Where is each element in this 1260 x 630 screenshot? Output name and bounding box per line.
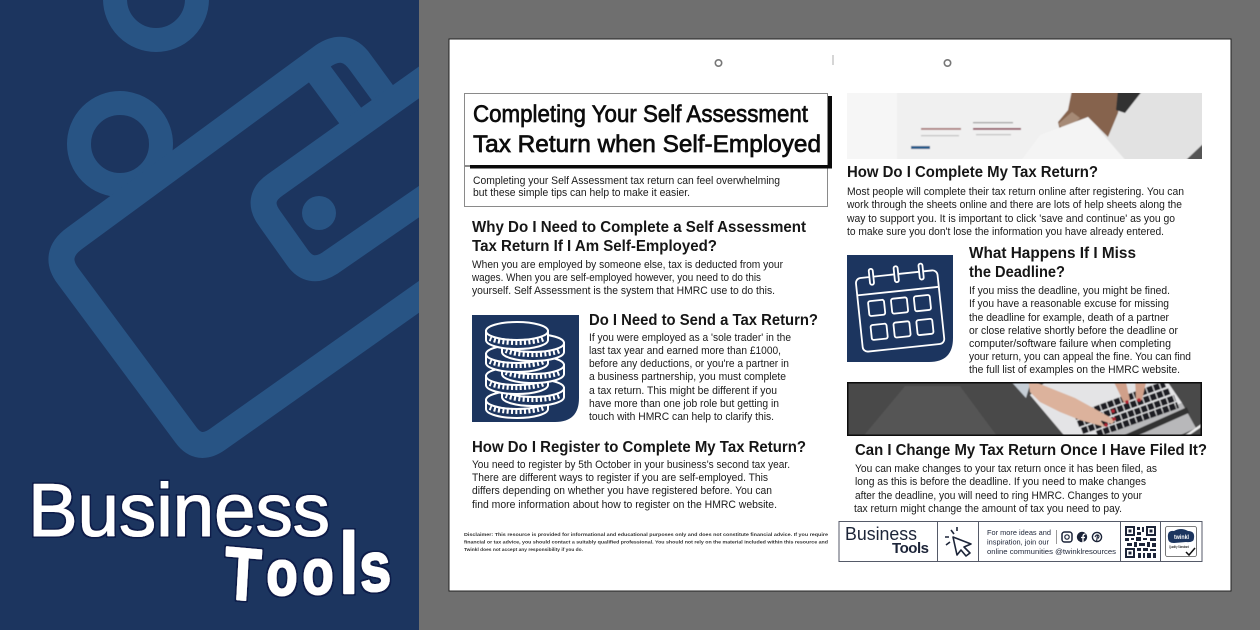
footer logo: Business Tools xyxy=(845,524,930,557)
icon: registration marks xyxy=(715,55,951,66)
section: how do I complete: to make sure you don't lose the information you have already entered. xyxy=(847,226,1164,238)
section: how do I complete: way to support you. It is important to click 'save and continue' as you go xyxy=(846,213,1175,225)
section: can I change my tax return: tax return might change the amount of tax you need to pay. xyxy=(854,503,1122,515)
disclaimer: Twinkl does not accept any responsibility if you do. xyxy=(464,547,583,552)
section: what happens if I miss the deadline: or close relative shortly before the deadline or xyxy=(969,325,1178,337)
title text: Tax Return when Self-Employed xyxy=(473,131,821,158)
icon: wallet watermark xyxy=(61,0,440,445)
section: do I need to send xyxy=(589,312,818,423)
section: how do I register: There are different ways to register if you are self-employed. This xyxy=(472,472,768,484)
section: do I need to send: touch with HMRC can help to clarify this. xyxy=(589,411,774,423)
footer call to action xyxy=(987,528,1116,556)
section: do I need to send: a tax return. This might be different if you xyxy=(589,385,777,397)
footer logo: Business Tools: Tools xyxy=(892,540,930,557)
section: how do I complete xyxy=(846,164,1184,238)
heading: Business Tools: o xyxy=(302,538,334,608)
section: how do I register: find more information about how to register on the HMRC website. xyxy=(472,499,777,511)
section: how do I complete: How Do I Complete My Tax Return? xyxy=(847,164,1098,181)
section: do I need to send: last tax year and earned more than £1000, xyxy=(589,345,781,357)
intro text: but these simple tips can help to make it easier. xyxy=(473,187,690,199)
section: what happens if I miss the deadline: the Deadline? xyxy=(969,264,1065,281)
section: how do I register: differs depending on whether you have registered before. You can xyxy=(472,485,772,497)
section: do I need to send: have more than one job role but getting in xyxy=(589,398,779,410)
icon: calendar xyxy=(847,255,953,362)
photo: hands typing on laptop xyxy=(847,382,1202,436)
section: why do I need: yourself. Self Assessment is the system that HMRC use to do this. xyxy=(472,285,775,297)
section: why do I need: Why Do I Need to Complete a Self Assessment xyxy=(472,219,806,236)
section: how do I register: How Do I Register to Complete My Tax Return? xyxy=(472,439,806,456)
badge: Twinkl: Quality Standard xyxy=(1169,545,1189,549)
disclaimer: financial or tax advice, you should contact a suitably qualified professional. You should not rely on the material included within this resource and xyxy=(464,540,828,544)
section: how do I complete: work through the sheets online and there are lots of help sheets along the xyxy=(846,199,1182,211)
panel: navy left banner xyxy=(0,0,440,630)
section: how do I register xyxy=(472,439,806,511)
icons: social media xyxy=(1062,532,1102,542)
heading: Business Tools: l xyxy=(339,516,358,612)
section: do I need to send: before any deductions, or you're a partner in xyxy=(589,358,789,370)
section: can I change my tax return: You can make changes to your tax return once it has been filed, as xyxy=(855,463,1157,475)
title text: Completing Your Self Assessment xyxy=(473,101,808,128)
icon: cursor click xyxy=(945,527,971,556)
footer logo: Business Tools: Business xyxy=(845,524,917,544)
intro text: Completing your Self Assessment tax return can feel overwhelming xyxy=(473,175,780,187)
section: can I change my tax return: long as this is before the deadline. If you need to make changes xyxy=(855,476,1146,488)
section: what happens if I miss the deadline: If you have a reasonable excuse for missing xyxy=(969,298,1169,310)
disclaimer: Disclaimer: This resource is provided for informational and educational purposes only and does not constitute financial advice. If you require xyxy=(464,532,829,537)
intro text xyxy=(473,175,780,199)
heading: Business Tools: s xyxy=(357,528,393,607)
heading: Business Tools: Business xyxy=(28,468,330,552)
section: what happens if I miss the deadline xyxy=(969,245,1191,376)
section: what happens if I miss the deadline: your return, you can appeal the fine. You can find xyxy=(969,351,1191,363)
section: why do I need: wages. When you are self-employed however, you need to do this xyxy=(471,272,761,284)
icon: coin stack xyxy=(472,315,579,422)
photo: hand holding tax document xyxy=(847,93,1202,159)
footer call to action: For more ideas and xyxy=(987,528,1051,537)
section: why do I need: When you are employed by someone else, tax is deducted from your xyxy=(472,259,783,271)
section: what happens if I miss the deadline: the full list of examples on the HMRC website. xyxy=(969,364,1180,376)
heading: Business Tools: o xyxy=(266,539,298,609)
badge: Twinkl: twinkl xyxy=(1174,535,1189,541)
section: what happens if I miss the deadline: What Happens If I Miss xyxy=(969,245,1136,262)
footer call to action: online communities @twinklresources xyxy=(987,547,1116,556)
section: what happens if I miss the deadline: computer/software failure when completing xyxy=(969,338,1171,350)
title text xyxy=(473,101,821,158)
section: do I need to send: If you were employed as a 'sole trader' in the xyxy=(589,332,791,344)
icon: QR code xyxy=(1125,526,1156,558)
section: can I change my tax return xyxy=(854,442,1207,515)
section: can I change my tax return: after the deadline, you will need to ring HMRC. Changes to your xyxy=(855,490,1142,502)
badge: Twinkl xyxy=(1166,526,1196,556)
section: why do I need: Tax Return If I Am Self-Employed? xyxy=(472,238,717,255)
heading: Business Tools xyxy=(28,468,393,618)
panel: document page xyxy=(449,39,1231,591)
section: what happens if I miss the deadline: the deadline for example, death of a partner xyxy=(969,312,1169,324)
section: do I need to send: a business partnership, you must complete xyxy=(589,371,786,383)
section: can I change my tax return: Can I Change My Tax Return Once I Have Filed It? xyxy=(855,442,1207,459)
section: what happens if I miss the deadline: If you miss the deadline, you might be fined. xyxy=(969,285,1170,297)
footer call to action: inspiration, join our xyxy=(987,538,1050,546)
disclaimer xyxy=(464,532,829,552)
section: why do I need xyxy=(471,219,806,297)
section: how do I register: You need to register by 5th October in your business's second tax year. xyxy=(472,459,790,471)
heading: Business Tools: T xyxy=(222,532,263,618)
title box xyxy=(464,94,832,206)
section: do I need to send: Do I Need to Send a Tax Return? xyxy=(589,312,818,329)
section: how do I complete: Most people will complete their tax return online after registering. You can xyxy=(847,186,1184,198)
footer strip xyxy=(839,522,1202,562)
